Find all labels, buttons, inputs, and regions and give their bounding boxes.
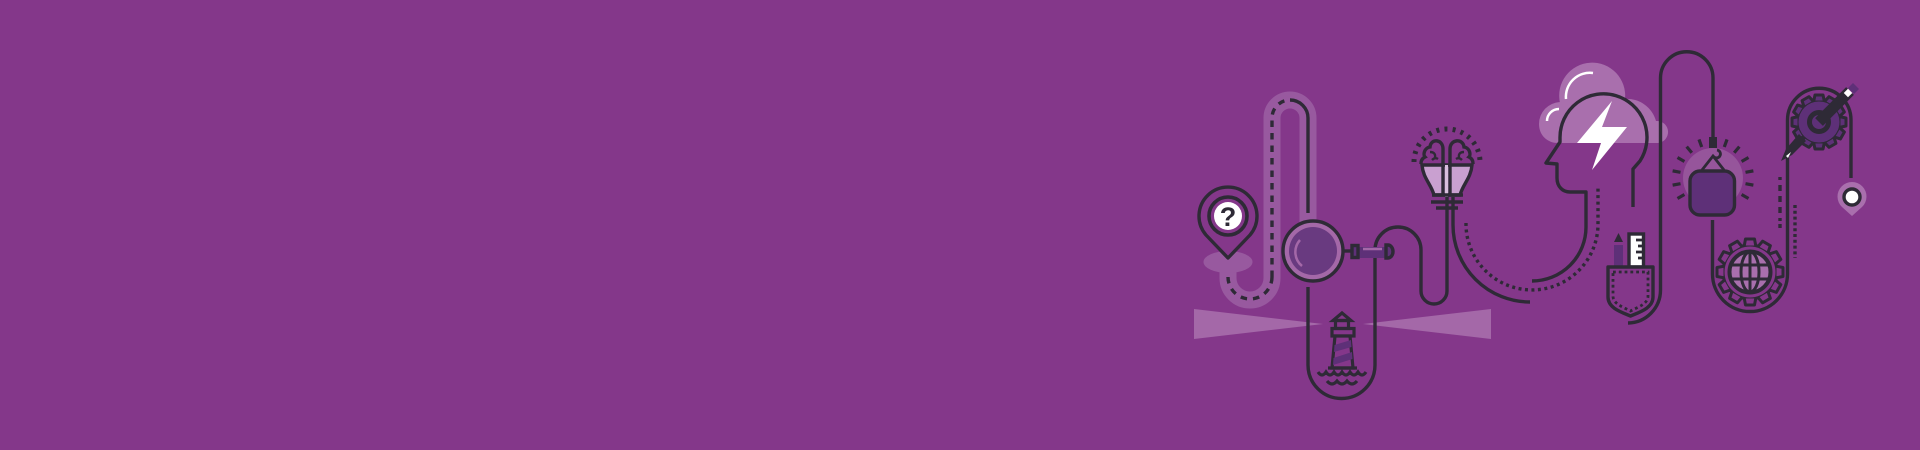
- icon: globe gear: [1717, 239, 1783, 305]
- icon: lightning bolt: [1577, 101, 1627, 170]
- path: line around globe gear up to pen gear: [1712, 88, 1851, 312]
- light beams: [1194, 309, 1491, 339]
- icon: magnifying glass: [1283, 221, 1393, 281]
- icon: question pin: ?: [1220, 202, 1236, 232]
- path: line through lighthouse and bulb: [1308, 197, 1447, 398]
- icon: pocket with ruler and pencil: [1608, 233, 1653, 316]
- light road band: [1228, 100, 1308, 300]
- path: dotted arc: [1466, 186, 1598, 290]
- icon: lighthouse: [1318, 313, 1366, 384]
- icon: pen gear: [1792, 95, 1846, 149]
- path: dotted line beside loop: [1793, 205, 1797, 258]
- icon: question pin: [1199, 187, 1257, 258]
- path: long loop to the hook: [1628, 52, 1713, 323]
- icon: brain lightbulb: [1414, 129, 1480, 208]
- icon: end location pin: [1838, 182, 1866, 216]
- icon: location pin shadow: [1204, 251, 1252, 273]
- icon: glow behind hanging box: [1683, 148, 1743, 208]
- path: dashed line right of box: [1778, 177, 1782, 228]
- icon: cloud: [1539, 63, 1668, 143]
- path: curve from bulb: [1453, 197, 1530, 302]
- path: dashed route: [1228, 100, 1308, 299]
- icon: pen: [1781, 83, 1859, 161]
- icon: head profile: [1532, 94, 1647, 281]
- icon: hanging box with rays: [1673, 137, 1753, 215]
